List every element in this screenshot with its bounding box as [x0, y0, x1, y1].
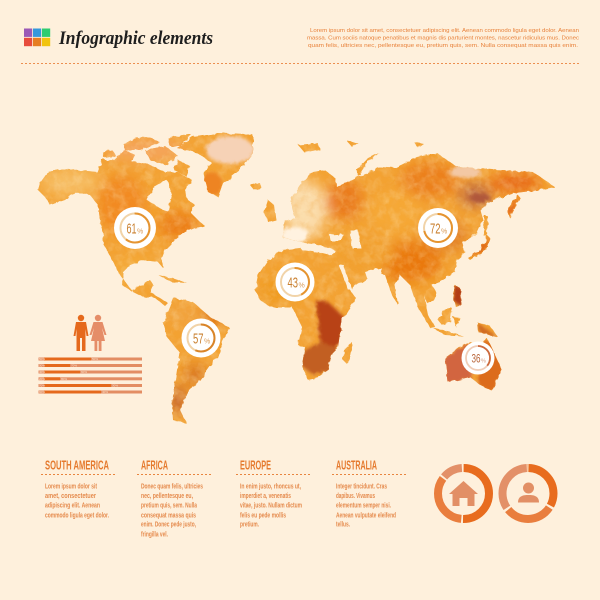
panel: South America: amet, consectetuer: [45, 491, 96, 500]
panel: South America: SOUTH AMERICA: [45, 458, 109, 472]
bar chart: gender percentages: 60%: [39, 390, 45, 394]
bar chart: gender percentages: 40%: [39, 370, 45, 374]
marker: North America 61%: 61: [126, 220, 136, 238]
panel: Australia: Aenean vulputate eleifend: [336, 510, 396, 520]
panel: South America: adipiscing elit. Aenean: [45, 500, 100, 510]
panel: Australia: elementum semper nisi.: [336, 500, 391, 510]
panel: Europe: vitae, justo. Nullam dictum: [240, 500, 302, 510]
panel: Europe: felis eu pede mollis: [240, 510, 286, 520]
marker: North America 61%: [114, 207, 156, 249]
icon: male figure: [74, 315, 88, 351]
marker: Asia 72%: [418, 208, 458, 248]
marker: Africa 43%: 43: [288, 274, 298, 292]
panel: Europe: [236, 458, 310, 528]
panel: Africa: pretium quis, sem. Nulla: [141, 500, 198, 510]
icon: house: [449, 481, 478, 506]
icon: colour squares logo: [24, 28, 50, 46]
panel: Europe: In enim justo, rhoncus ut,: [240, 482, 301, 490]
panel: Africa: AFRICA: [141, 458, 168, 472]
panel: Africa: nec, pellentesque eu,: [141, 491, 193, 500]
bar chart: gender percentages: 20%: [39, 377, 45, 381]
panel: Australia: [332, 458, 406, 528]
panel: Australia: dapibus. Vivamus: [336, 491, 375, 500]
panel: Africa: Donec quam felis, ultricies: [141, 482, 203, 490]
panel: South America: [41, 458, 115, 520]
marker: Africa 43%: %: [298, 282, 305, 290]
bar chart: gender percentages: 50%: [39, 357, 45, 361]
bar chart: gender percentages: 70%: [71, 364, 77, 368]
intro text block: [307, 28, 579, 49]
water cut-outs: [147, 180, 382, 290]
panel: Africa: [137, 458, 211, 538]
bar chart: gender percentages: 30%: [112, 384, 118, 388]
panel: South America: Lorem ipsum dolor sit: [45, 482, 97, 490]
marker: South America 57%: 57: [193, 330, 204, 348]
panel: Europe: EUROPE: [240, 458, 271, 472]
intro text block: quam felis, ultricies nec, pellentesque eu, pretium quis, sem. Nulla consequat massa quis enim.: [308, 43, 578, 49]
marker: South America 57%: [182, 318, 220, 358]
intro text block: Lorem ipsum dolor sit amet, consectetuer adipiscing elit. Aenean commodo ligula eget dolor. Aenean: [310, 28, 579, 34]
bar chart: gender percentages: 80%: [61, 377, 67, 381]
bar chart: gender percentages: [38, 357, 142, 394]
donut chart: home: [438, 468, 489, 519]
marker: Asia 72%: 72: [430, 220, 440, 238]
panel: Africa: fringilla vel.: [141, 530, 168, 538]
panel: Europe: pretium.: [240, 520, 259, 528]
bar chart: gender percentages: 70%: [39, 384, 45, 388]
panel: Australia: AUSTRALIA: [336, 458, 377, 472]
title: Infographic elements: [58, 28, 213, 49]
marker: Australia 36%: [462, 342, 494, 374]
intro text block: massa. Cum sociis natoque penatibus et magnis dis parturient montes, nascetur ridiculus mus. Donec: [307, 36, 579, 42]
panel: Australia: tellus.: [336, 520, 350, 528]
bar chart: gender percentages: 60%: [81, 370, 87, 374]
marker: Asia 72%: %: [441, 228, 447, 236]
icon: person: [518, 482, 539, 502]
panel: Australia: Integer tincidunt. Cras: [336, 482, 387, 490]
panel: South America: commodo ligula eget dolor.: [45, 510, 109, 520]
marker: South America 57%: %: [204, 338, 210, 346]
panel: Africa: consequat massa quis: [141, 510, 196, 520]
bar chart: gender percentages: 30%: [39, 364, 45, 368]
marker: Africa 43%: [276, 262, 314, 302]
bar chart: gender percentages: 40%: [102, 390, 108, 394]
world map: [38, 132, 555, 424]
marker: North America 61%: %: [137, 228, 143, 236]
donut chart: person: [502, 468, 554, 519]
icon: female figure: [90, 315, 106, 351]
panel: Africa: enim. Donec pede justo,: [141, 520, 196, 528]
marker: Australia 36%: %: [481, 358, 486, 364]
panel: Europe: imperdiet a, venenatis: [240, 491, 291, 500]
marker: Australia 36%: 36: [472, 352, 481, 366]
bar chart: gender percentages: 50%: [92, 357, 98, 361]
